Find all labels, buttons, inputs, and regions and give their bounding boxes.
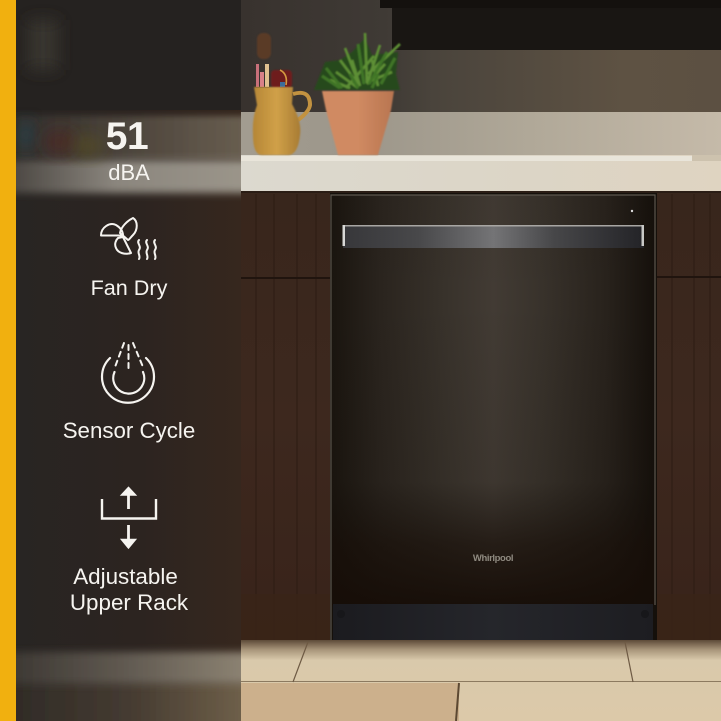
stat: 51 dBA: [106, 115, 150, 185]
feature: fan dry: [91, 218, 168, 300]
stat: 51 dBA: dBA: [108, 160, 150, 185]
dishwasher handle: [342, 225, 644, 248]
stat: 51 dBA: 51: [106, 115, 148, 158]
label: sensor cycle: Sensor Cycle: [63, 418, 195, 443]
kitchen background wall: [241, 0, 721, 113]
dishwasher: [330, 193, 657, 640]
whirlpool logo: Whirlpool: [473, 553, 513, 564]
label: adjustable upper rack: Adjustable: [73, 564, 178, 589]
label: fan dry: Fan Dry: [91, 275, 168, 300]
feature: sensor cycle: [63, 343, 195, 443]
potted plant: [314, 33, 400, 155]
backsplash and countertop: [241, 112, 721, 194]
indicator light: [631, 210, 633, 212]
blurred left panel: [16, 0, 241, 721]
feature: adjustable upper rack: [70, 488, 189, 615]
floor tiles: [241, 640, 721, 721]
feature: adjustable upper rack: Upper Rack: [70, 590, 189, 615]
icon: fan with heat waves: [101, 218, 156, 259]
icon: sensor spray: [102, 343, 154, 403]
cabinets: [241, 193, 721, 640]
yellow side bar: [0, 0, 16, 721]
icon: rack with up and down arrows: [102, 488, 156, 548]
toe kick: [333, 604, 653, 640]
upper cabinet: [380, 0, 721, 50]
pitcher with pens: [253, 33, 310, 155]
